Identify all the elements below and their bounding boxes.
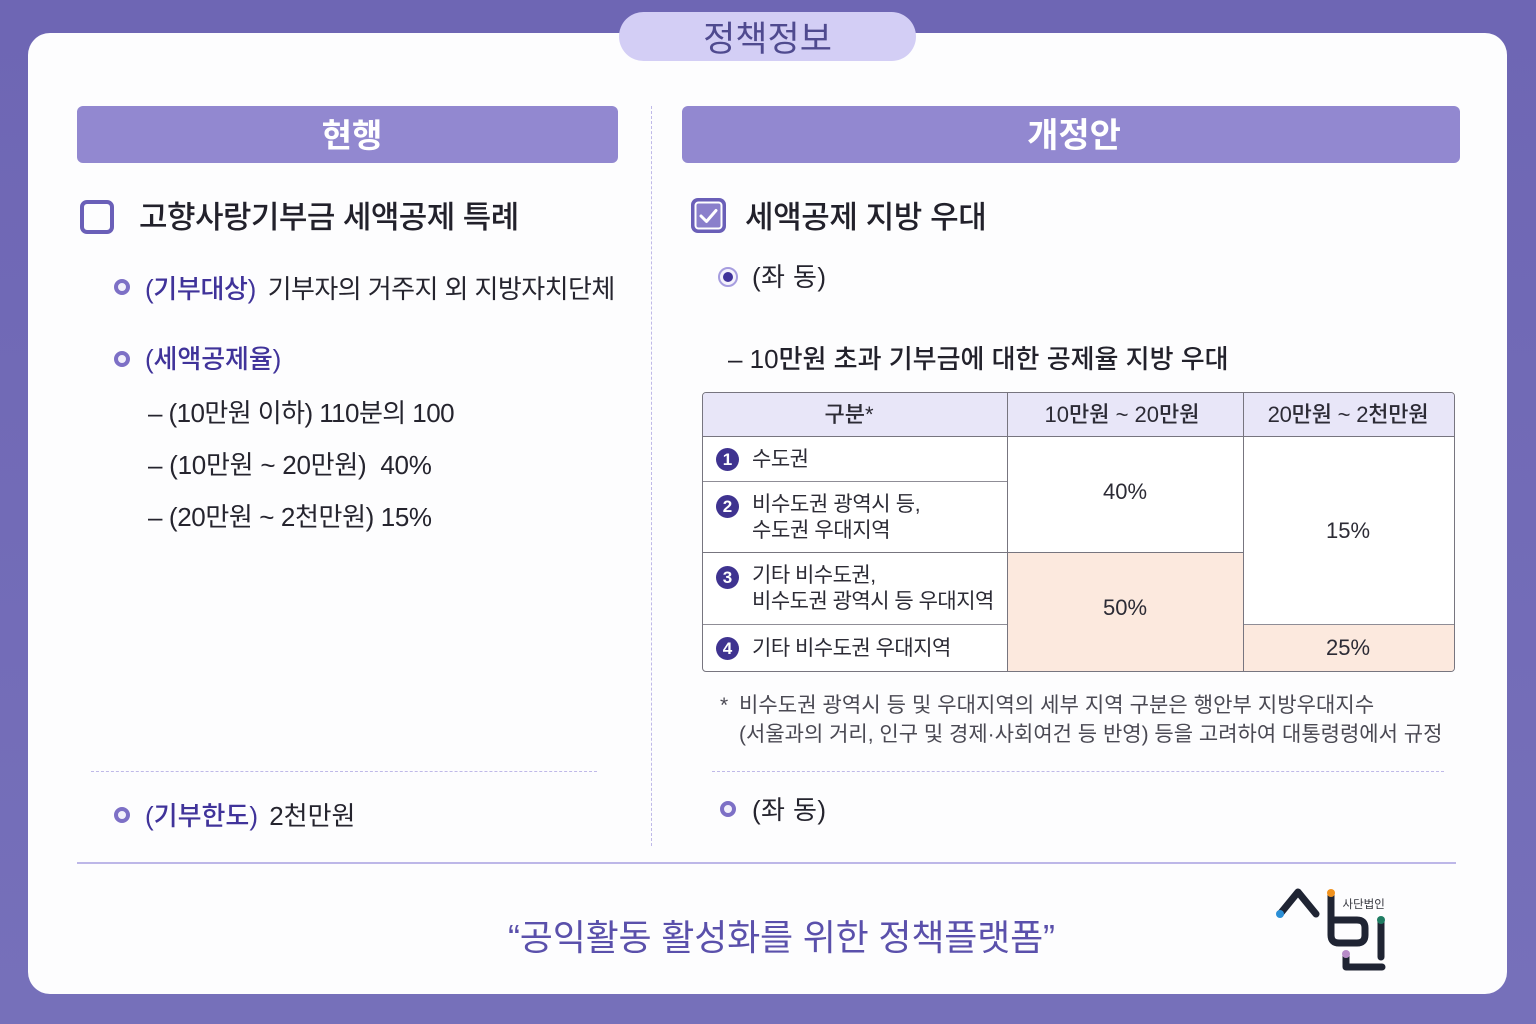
table: deduction by region: 비수도권 광역시 등 우대지역 (752, 590, 994, 613)
panel: current law (80, 200, 615, 532)
rate values: 40% (1103, 479, 1147, 504)
highlighted 25% cell (1244, 624, 1454, 671)
title pill (619, 12, 916, 61)
highlighted 50% cell (1008, 552, 1244, 671)
table: deduction by region: 50% (1103, 595, 1147, 620)
right lower divider (712, 771, 1444, 772)
bullet: donation limit: (기부한도) 2천만원 (145, 801, 355, 831)
row 2: 2 (723, 497, 732, 516)
horizontal rules (703, 436, 1454, 437)
bullet: unchanged (limit): (좌 동) (752, 795, 826, 825)
table footnote: * (720, 694, 728, 717)
title pill: 정책정보 (703, 20, 832, 59)
footer slogan: “공익활동 활성화를 위한 정책플랫폼” (508, 917, 1055, 958)
panel: current law header (77, 106, 618, 163)
table: deduction by region: 기타 비수도권 우대지역 (752, 637, 951, 660)
row 4 (716, 637, 739, 660)
icon: checked checkbox (691, 198, 726, 233)
table footnote: 비수도권 광역시 등 및 우대지역의 세부 지역 구분은 행안부 지방우대지수 (739, 694, 1374, 717)
bullet: unchanged (limit) (720, 795, 826, 825)
bullet: unchanged (target): (좌 동) (752, 262, 826, 292)
header labels: 구분* (824, 402, 874, 427)
left lower divider (91, 771, 597, 772)
table: deduction by region: 수도권 우대지역 (752, 519, 890, 542)
bullet: deduction rate: (세액공제율) (145, 344, 281, 374)
table footnote (720, 694, 1442, 746)
table header row (703, 393, 1454, 436)
panel: amendment header (682, 106, 1460, 163)
row 3: 3 (723, 568, 732, 587)
table: deduction by region: 수도권 (752, 448, 808, 471)
table footnote: (서울과의 거리, 인구 및 경제·사회여건 등 반영) 등을 고려하여 대통령령에서 규정 (739, 723, 1442, 746)
table: deduction by region (702, 392, 1455, 672)
row 2 (716, 495, 739, 518)
subheading: table title: – 10만원 초과 기부금에 대한 공제율 지방 우대 (728, 344, 1229, 374)
bullet: unchanged (target) (718, 262, 826, 292)
row 3 (716, 566, 739, 589)
bullet: donation target: (기부대상) 기부자의 거주지 외 지방자치단체 (145, 274, 615, 304)
table: deduction by region: 15% (1326, 518, 1370, 543)
heading: hometown donation: 고향사랑기부금 세액공제 특례 (139, 200, 519, 235)
row 4: 4 (723, 639, 732, 658)
panel: amendment header: 개정안 (1027, 117, 1121, 155)
table: deduction by region: 25% (1326, 635, 1370, 660)
table: deduction by region: 20만원 ~ 2천만원 (1268, 402, 1428, 427)
icon: empty checkbox (80, 200, 114, 234)
table: deduction by region: 기타 비수도권, (752, 564, 876, 587)
rate lines: – (10만원 이하) 110분의 100 (148, 398, 454, 428)
row 1: 1 (723, 450, 732, 469)
vertical rules (1007, 393, 1008, 671)
rate lines: – (20만원 ~ 2천만원) 15% (148, 502, 432, 532)
table: deduction by region: 비수도권 광역시 등, (752, 493, 920, 516)
footer divider (77, 862, 1456, 864)
panel: current law header: 현행 (322, 117, 382, 154)
logo (1276, 888, 1386, 970)
logo: 사단법인 (1342, 898, 1385, 911)
row 1 (716, 448, 739, 471)
table: deduction by region: 10만원 ~ 20만원 (1044, 402, 1199, 427)
column divider (651, 106, 652, 846)
rate lines (148, 398, 454, 532)
rate lines: – (10만원 ~ 20만원) 40% (148, 450, 432, 480)
heading: regional preference: 세액공제 지방 우대 (745, 200, 986, 235)
